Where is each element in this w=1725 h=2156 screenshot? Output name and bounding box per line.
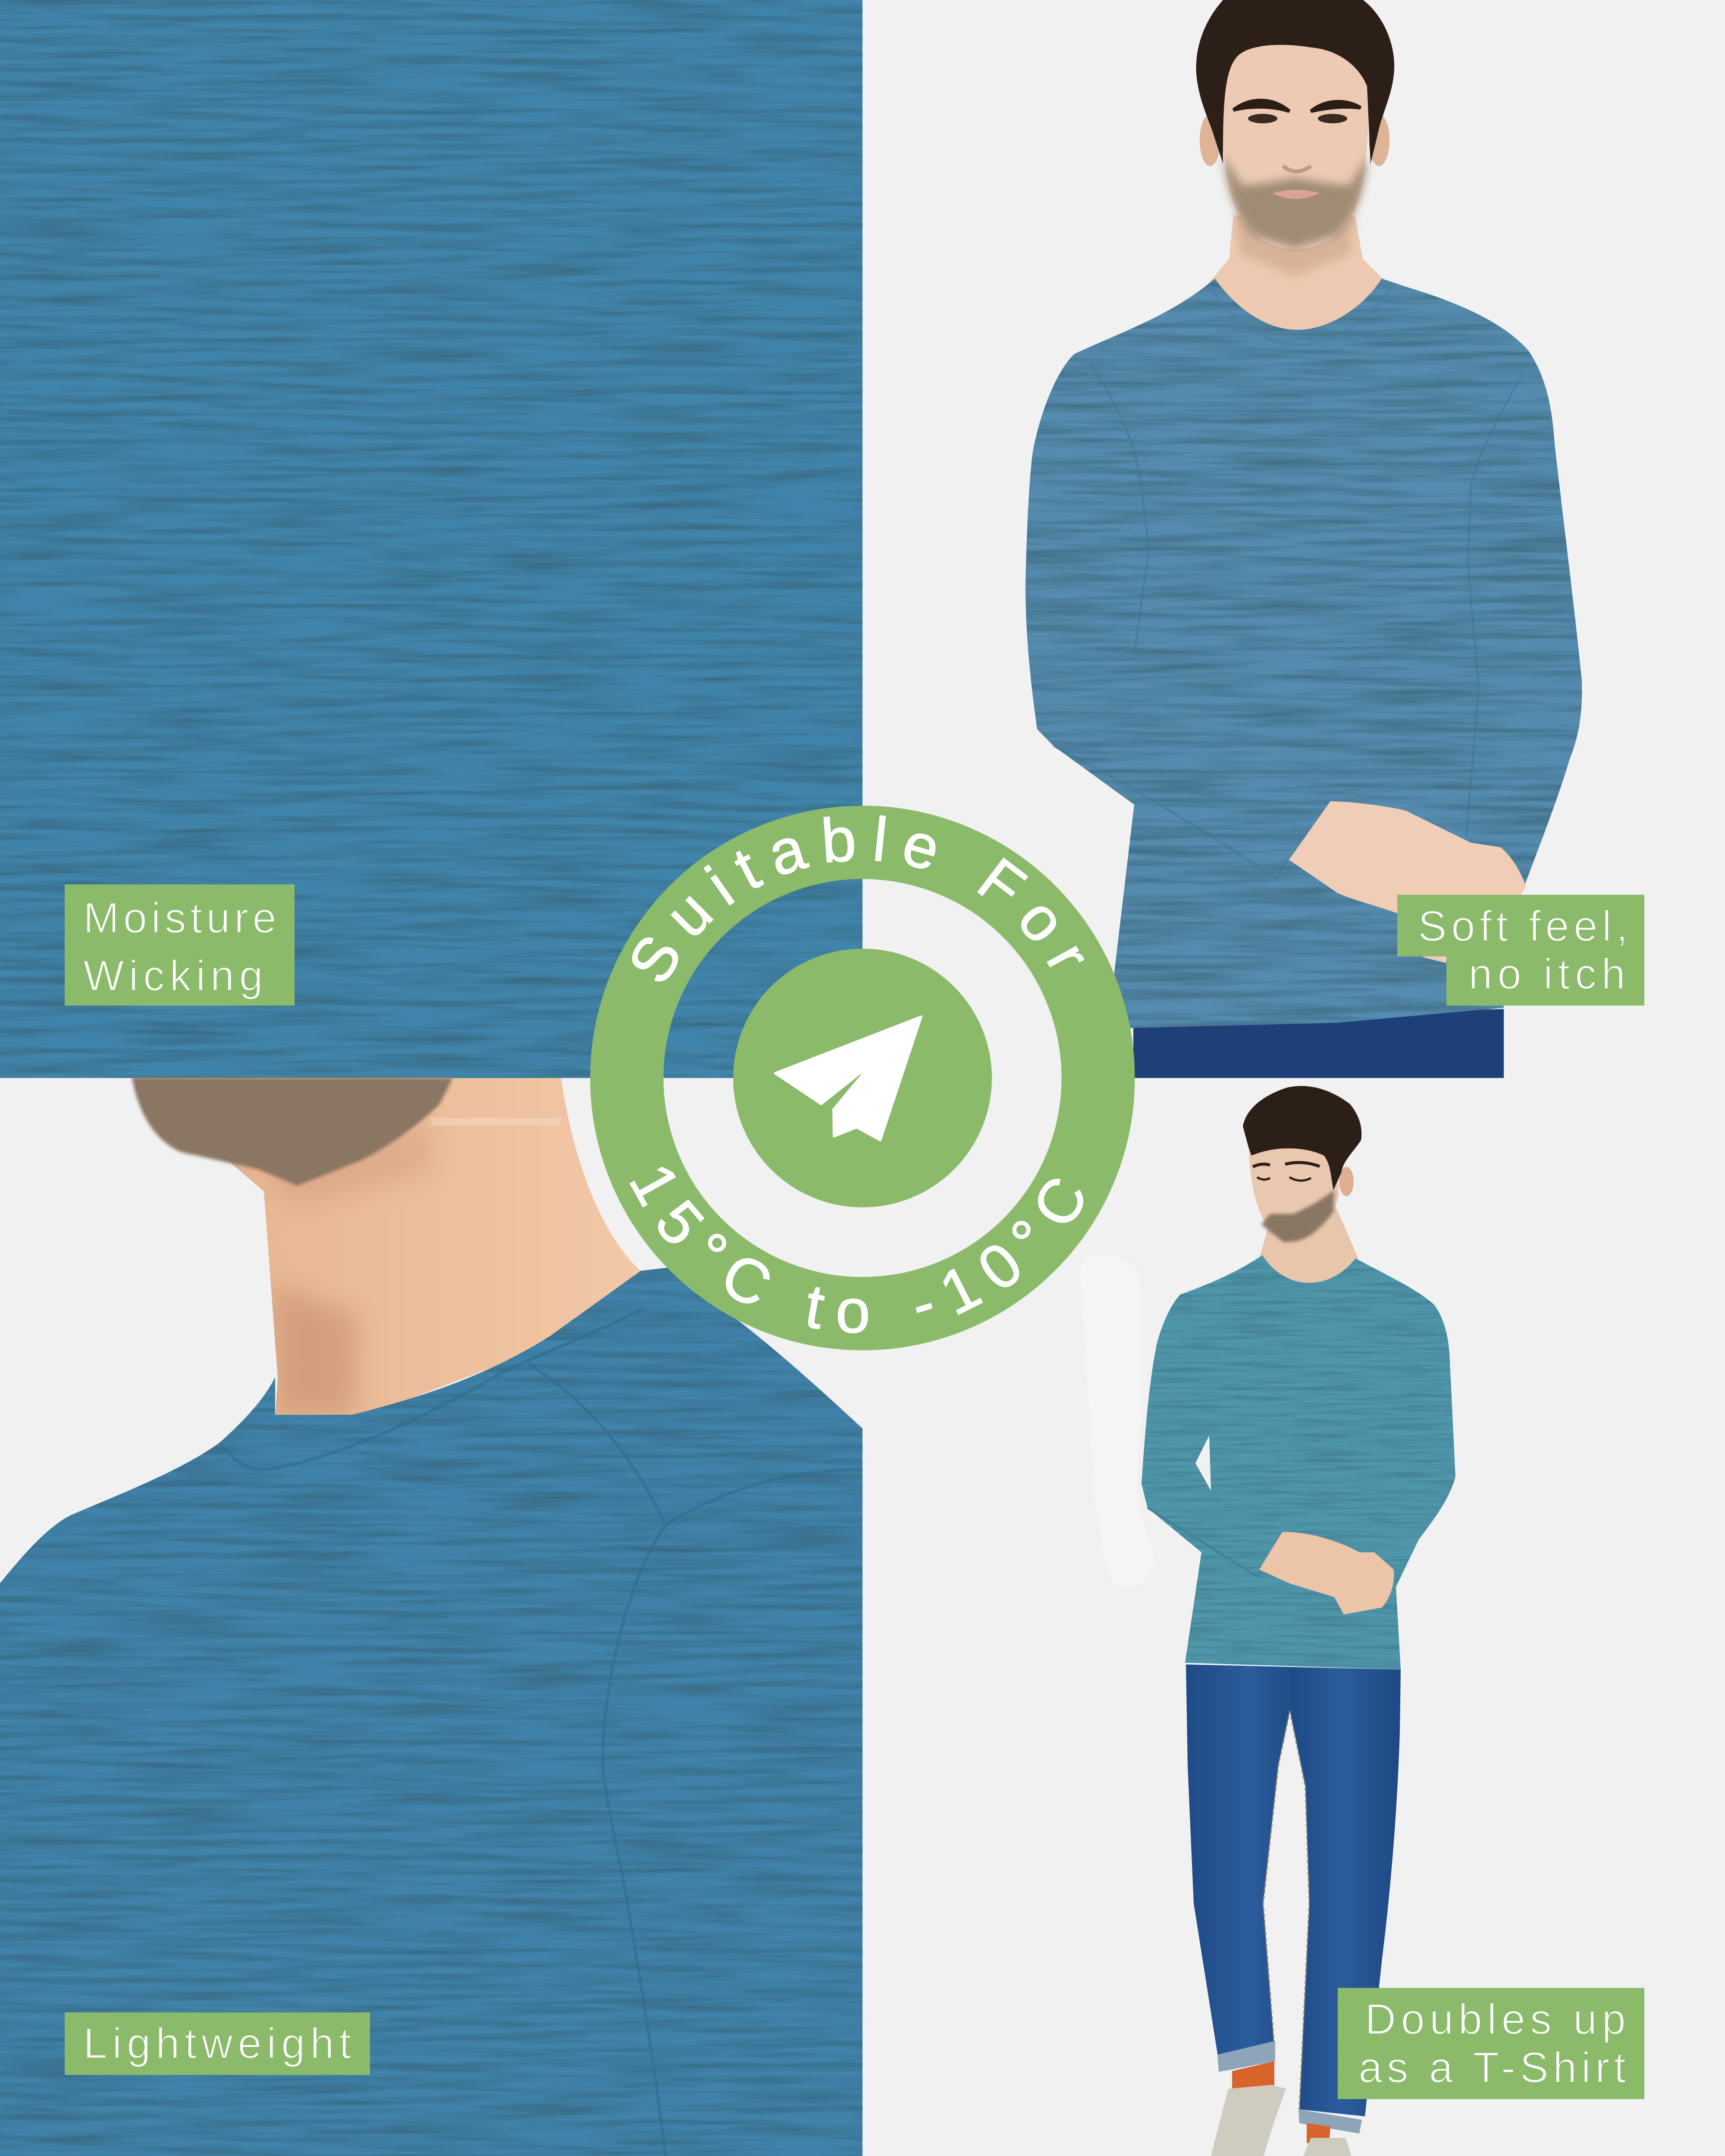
badge centre disc	[733, 949, 992, 1207]
label: Moisture Wicking	[65, 884, 295, 1006]
sleeve hem	[1148, 1508, 1282, 1576]
label: Moisture Wicking: Wicking	[83, 952, 263, 1000]
icon: paper plane	[775, 1017, 921, 1140]
neck skin	[132, 1078, 647, 1421]
label: Soft feel, no itch: Soft feel,	[1418, 902, 1628, 950]
jeans cuffs	[1217, 2041, 1362, 2134]
jeans	[1133, 1009, 1504, 1078]
label: Doubles up as a T-Shirt: as a T-Shirt	[1358, 2043, 1626, 2092]
badge ring	[627, 843, 1098, 1313]
label: Doubles up as a T-Shirt	[1338, 1988, 1644, 2099]
neck	[1208, 216, 1389, 345]
hair	[1196, 0, 1394, 164]
hair	[1243, 1086, 1361, 1190]
panel: man portrait, top right	[1026, 0, 1582, 1078]
chin shadow	[1236, 216, 1354, 276]
jeans stitching	[1263, 1711, 1309, 2109]
collar rib	[1208, 285, 1391, 345]
arc text: temperature range: 15°C to -10°C	[616, 1151, 1109, 1346]
beard	[1261, 1190, 1334, 1242]
shoes	[1211, 2085, 1352, 2156]
nose and lips	[1272, 166, 1320, 199]
long sleeve shirt	[1026, 279, 1582, 1028]
shirt shoulder	[0, 1267, 862, 2156]
beard and jaw	[132, 1078, 453, 1186]
jeans	[1186, 1664, 1401, 2116]
eyebrows and eyes	[1233, 100, 1361, 123]
label: Lightweight: Lightweight	[83, 2019, 351, 2068]
sleeve seams	[1054, 364, 1524, 879]
arc text: Suitable For: Suitable For	[615, 803, 1111, 995]
label: Soft feel, no itch	[1397, 895, 1644, 1006]
neck shadow	[259, 1121, 431, 1416]
panel: full-length man, bottom right	[1080, 1086, 1455, 2156]
panel: fabric close-up	[0, 0, 862, 1078]
hands	[1289, 801, 1526, 963]
label: Doubles up as a T-Shirt: Doubles up	[1365, 1995, 1626, 2043]
hands	[1259, 1532, 1394, 1614]
face	[1221, 26, 1369, 249]
underarm gap	[1195, 1435, 1211, 1491]
shoulder seams	[220, 1308, 862, 2156]
ears	[1200, 114, 1220, 166]
teal long sleeve shirt	[1142, 1255, 1455, 1670]
ear	[1339, 1167, 1354, 1196]
label: Lightweight	[65, 2012, 370, 2075]
label: Soft feel, no itch: no itch	[1468, 950, 1625, 998]
face	[1248, 1130, 1339, 1242]
socks	[1232, 2061, 1330, 2143]
faint retouch smear	[1080, 1256, 1154, 1589]
badge: suitable for	[615, 803, 1111, 1346]
beard	[1223, 155, 1368, 248]
neck	[1259, 1203, 1358, 1294]
faint skin band	[431, 1118, 561, 1125]
label: Moisture Wicking: Moisture	[83, 894, 276, 942]
eyebrows and eyes	[1253, 1163, 1320, 1181]
panel: neck and shoulder close-up	[0, 1078, 862, 2156]
